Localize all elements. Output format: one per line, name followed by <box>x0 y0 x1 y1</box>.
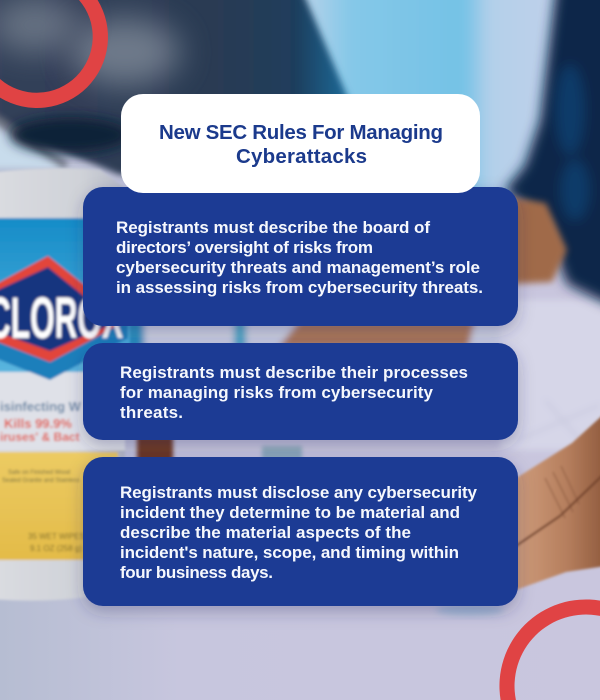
background: cleaning wipes tub: Sealed Granite and Stainless <box>2 478 80 484</box>
text: incident disclosure rule: incident's nature, scope, and timing within <box>120 543 459 562</box>
text: board oversight rule: cybersecurity threats and management’s role <box>116 258 480 277</box>
text: risk management processes rule: Registrants must describe their processes <box>120 363 468 382</box>
background: gap tones behind panels <box>115 318 525 350</box>
text: board oversight rule: in assessing risks from cybersecurity threats. <box>116 278 483 297</box>
text: incident disclosure rule: Registrants must disclose any cybersecurity <box>120 483 478 502</box>
text: board oversight rule: Registrants must describe the board of <box>116 218 430 237</box>
text: incident disclosure rule: describe the material aspects of the <box>120 523 411 542</box>
decorative ring: top left <box>0 0 108 108</box>
text: risk management processes rule: threats. <box>120 403 183 422</box>
background: cleaning wipes tub: Kills 99.9% <box>4 416 72 431</box>
background: keyboard <box>500 300 600 450</box>
background: sleeve and shirt <box>505 0 600 310</box>
background: cleaning wipes tub: Safe on Finished Wood <box>8 470 70 476</box>
background: cleaning wipes tub: isinfecting W <box>0 399 82 414</box>
background: monitor highlight left <box>0 0 80 53</box>
text: incident disclosure rule: four business days. <box>120 563 273 582</box>
panel: incident disclosure rule <box>83 457 518 606</box>
panel: risk management processes rule <box>83 343 518 440</box>
decorative ring: bottom right <box>499 599 600 700</box>
panel: board oversight rule <box>83 187 518 326</box>
background: soft blue reflection <box>436 604 504 616</box>
background: gap tones lower <box>137 432 302 462</box>
background: hand <box>510 412 600 592</box>
background: cleaning wipes tub: 35 WET WIPES <box>28 532 85 541</box>
background: monitor highlight <box>70 18 180 86</box>
title: New SEC Rules For Managing <box>159 121 443 144</box>
background: cleaning wipes tub <box>0 168 130 601</box>
title card <box>121 94 480 193</box>
background: monitor lower shadow <box>10 117 130 153</box>
background: dark monitor <box>0 0 348 175</box>
text: risk management processes rule: for managing risks from cybersecurity <box>120 383 434 402</box>
text: board oversight rule: directors’ oversight of risks from <box>116 238 373 257</box>
title: Cyberattacks <box>236 145 367 168</box>
background: sky-blue screen glow <box>296 0 566 240</box>
text: incident disclosure rule: incident they determine to be material and <box>120 503 460 522</box>
background: forearm <box>510 197 567 284</box>
background: cleaning wipes tub: 9.1 OZ (258 g) <box>30 544 82 553</box>
background: cleaning wipes tub: iruses' & Bact <box>0 430 80 444</box>
